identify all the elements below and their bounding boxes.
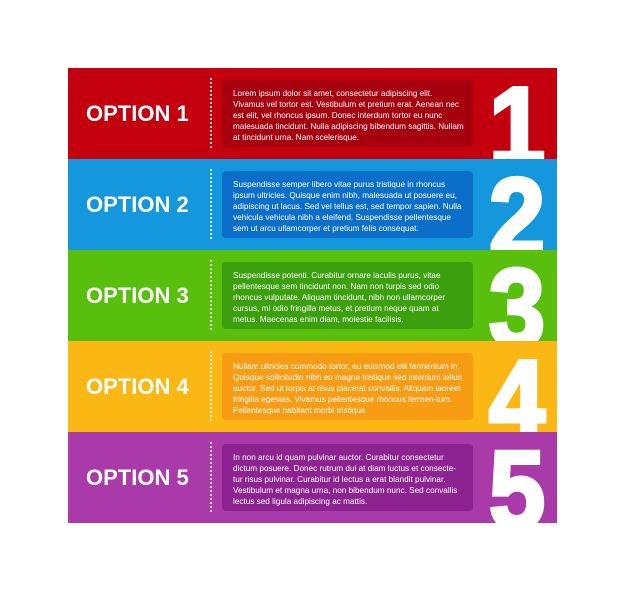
label: option 1: OPTION 1 [86, 101, 189, 126]
text box 3 [222, 262, 473, 329]
band: option 2 [68, 159, 557, 250]
text box 5: In non arcu id quam pulvinar auctor. Curabitur consectetur dictum posuere. Donec rutrum dui at diam luctus et consecte-tur risus pulvinar. Curabitur id lectus a erat blandit pulvinar. Vestibulum et magna urna, non bibendum nunc. Sed convallis lectus sed ligula adipiscing ac mattis. [233, 453, 457, 506]
text box 4: Nullam ultricies commodo tortor, eu euismod elit fermentum in. Quisque sollicitudin nibh eu magna tristique sed interdum tellus auctor. Sed ut turpis at risus placerat convallis. Aliquam laoreet fringilla egestas. Vivamus pellentesque rhoncus fermen-tum. Pellentesque habitant morbi tristique. [233, 362, 462, 415]
band: option 5 [68, 432, 557, 523]
label: option 3: OPTION 3 [86, 283, 189, 308]
band: option 3 [68, 250, 557, 341]
text box 3: Suspendisse potenti. Curabitur ornare iaculis purus, vitae pellentesque sem tincidunt non. Nam non turpis sed odio rhoncus vulputate. Aliquam tincidunt, nibh non ullamcorper cursus, mi odio fringilla metus, et pretium neque quam at metus. Maecenas enim diam, molestie facilisis. [233, 271, 445, 324]
label: option 4: OPTION 4 [86, 374, 189, 399]
band: option 1 [68, 68, 557, 159]
text box 1: Lorem ipsum dolor sit amet, consectetur adipiscing elit. Vivamus vel tortor est. Vestibulum et pretium erat. Aenean nec est elit, vel rhoncus ipsum. Donec interdum tortor eu nunc malesuada tincidunt. Nulla adipiscing bibendum sagittis. Nullam at tincidunt urna. Nam scelerisque. [233, 89, 464, 142]
band: option 4 [68, 341, 557, 432]
label: option 2: OPTION 2 [86, 192, 189, 217]
label: option 5: OPTION 5 [86, 465, 189, 490]
text box 2: Suspendisse semper libero vitae purus tristique in rhoncus ipsum ultricies. Quisque enim nibh, malesuada ut posuere eu, adipiscing ut lacus. Sed vel tellus est, sed tempor sapien. Nulla vehicula vehicula nibh a eleifend. Suspendisse pellentesque sem ut arcu ullamcorper et pretium felis consequat. [233, 180, 461, 233]
